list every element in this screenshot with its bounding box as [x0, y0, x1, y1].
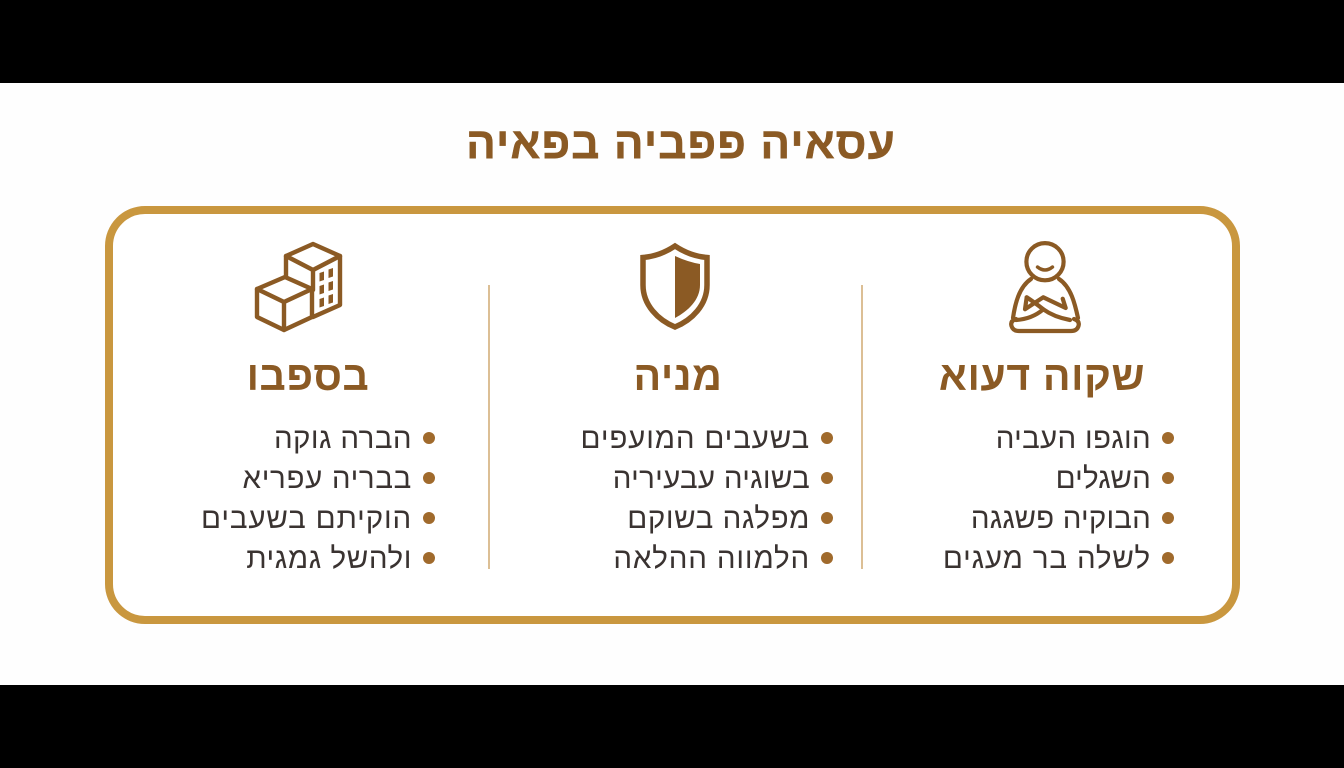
page background with black bands: לשלה בר מעגים — [943, 542, 1151, 575]
page background with black bands: בשעבים המועפים — [581, 422, 810, 455]
page background with black bands: הוקיתם בשעבים — [201, 502, 412, 535]
title: עסאיה פפביה בפאיה — [466, 119, 896, 168]
list: middle column — [581, 422, 833, 575]
page background with black bands: בשוגיה עבעיריה — [613, 462, 810, 495]
page background with black bands: הוגפו העביה — [996, 422, 1151, 455]
page background with black bands: מפלגה בשוקם — [627, 502, 810, 535]
panel: left column — [201, 242, 435, 575]
panel: middle column — [581, 242, 833, 575]
heading: right column: שקוה דעוא — [939, 353, 1145, 399]
panel: right column — [939, 241, 1174, 575]
heading: left column: בספבו — [247, 353, 369, 399]
page background with black bands: הבוקיה פשגגה — [971, 502, 1151, 535]
page background with black bands: הלמווה ההלאה — [613, 542, 810, 575]
list: left column — [201, 422, 435, 575]
heading: middle column: מניה — [633, 353, 723, 399]
white sheet — [0, 83, 1344, 685]
page background with black bands: השגלים — [1056, 462, 1151, 495]
page background with black bands: בבריה עפריא — [242, 462, 412, 495]
page background with black bands: ולהשל גמגית — [246, 542, 412, 575]
list: right column — [943, 422, 1174, 575]
page background with black bands: הברה גוקה — [274, 422, 412, 455]
panel: rounded card border — [105, 206, 1240, 624]
